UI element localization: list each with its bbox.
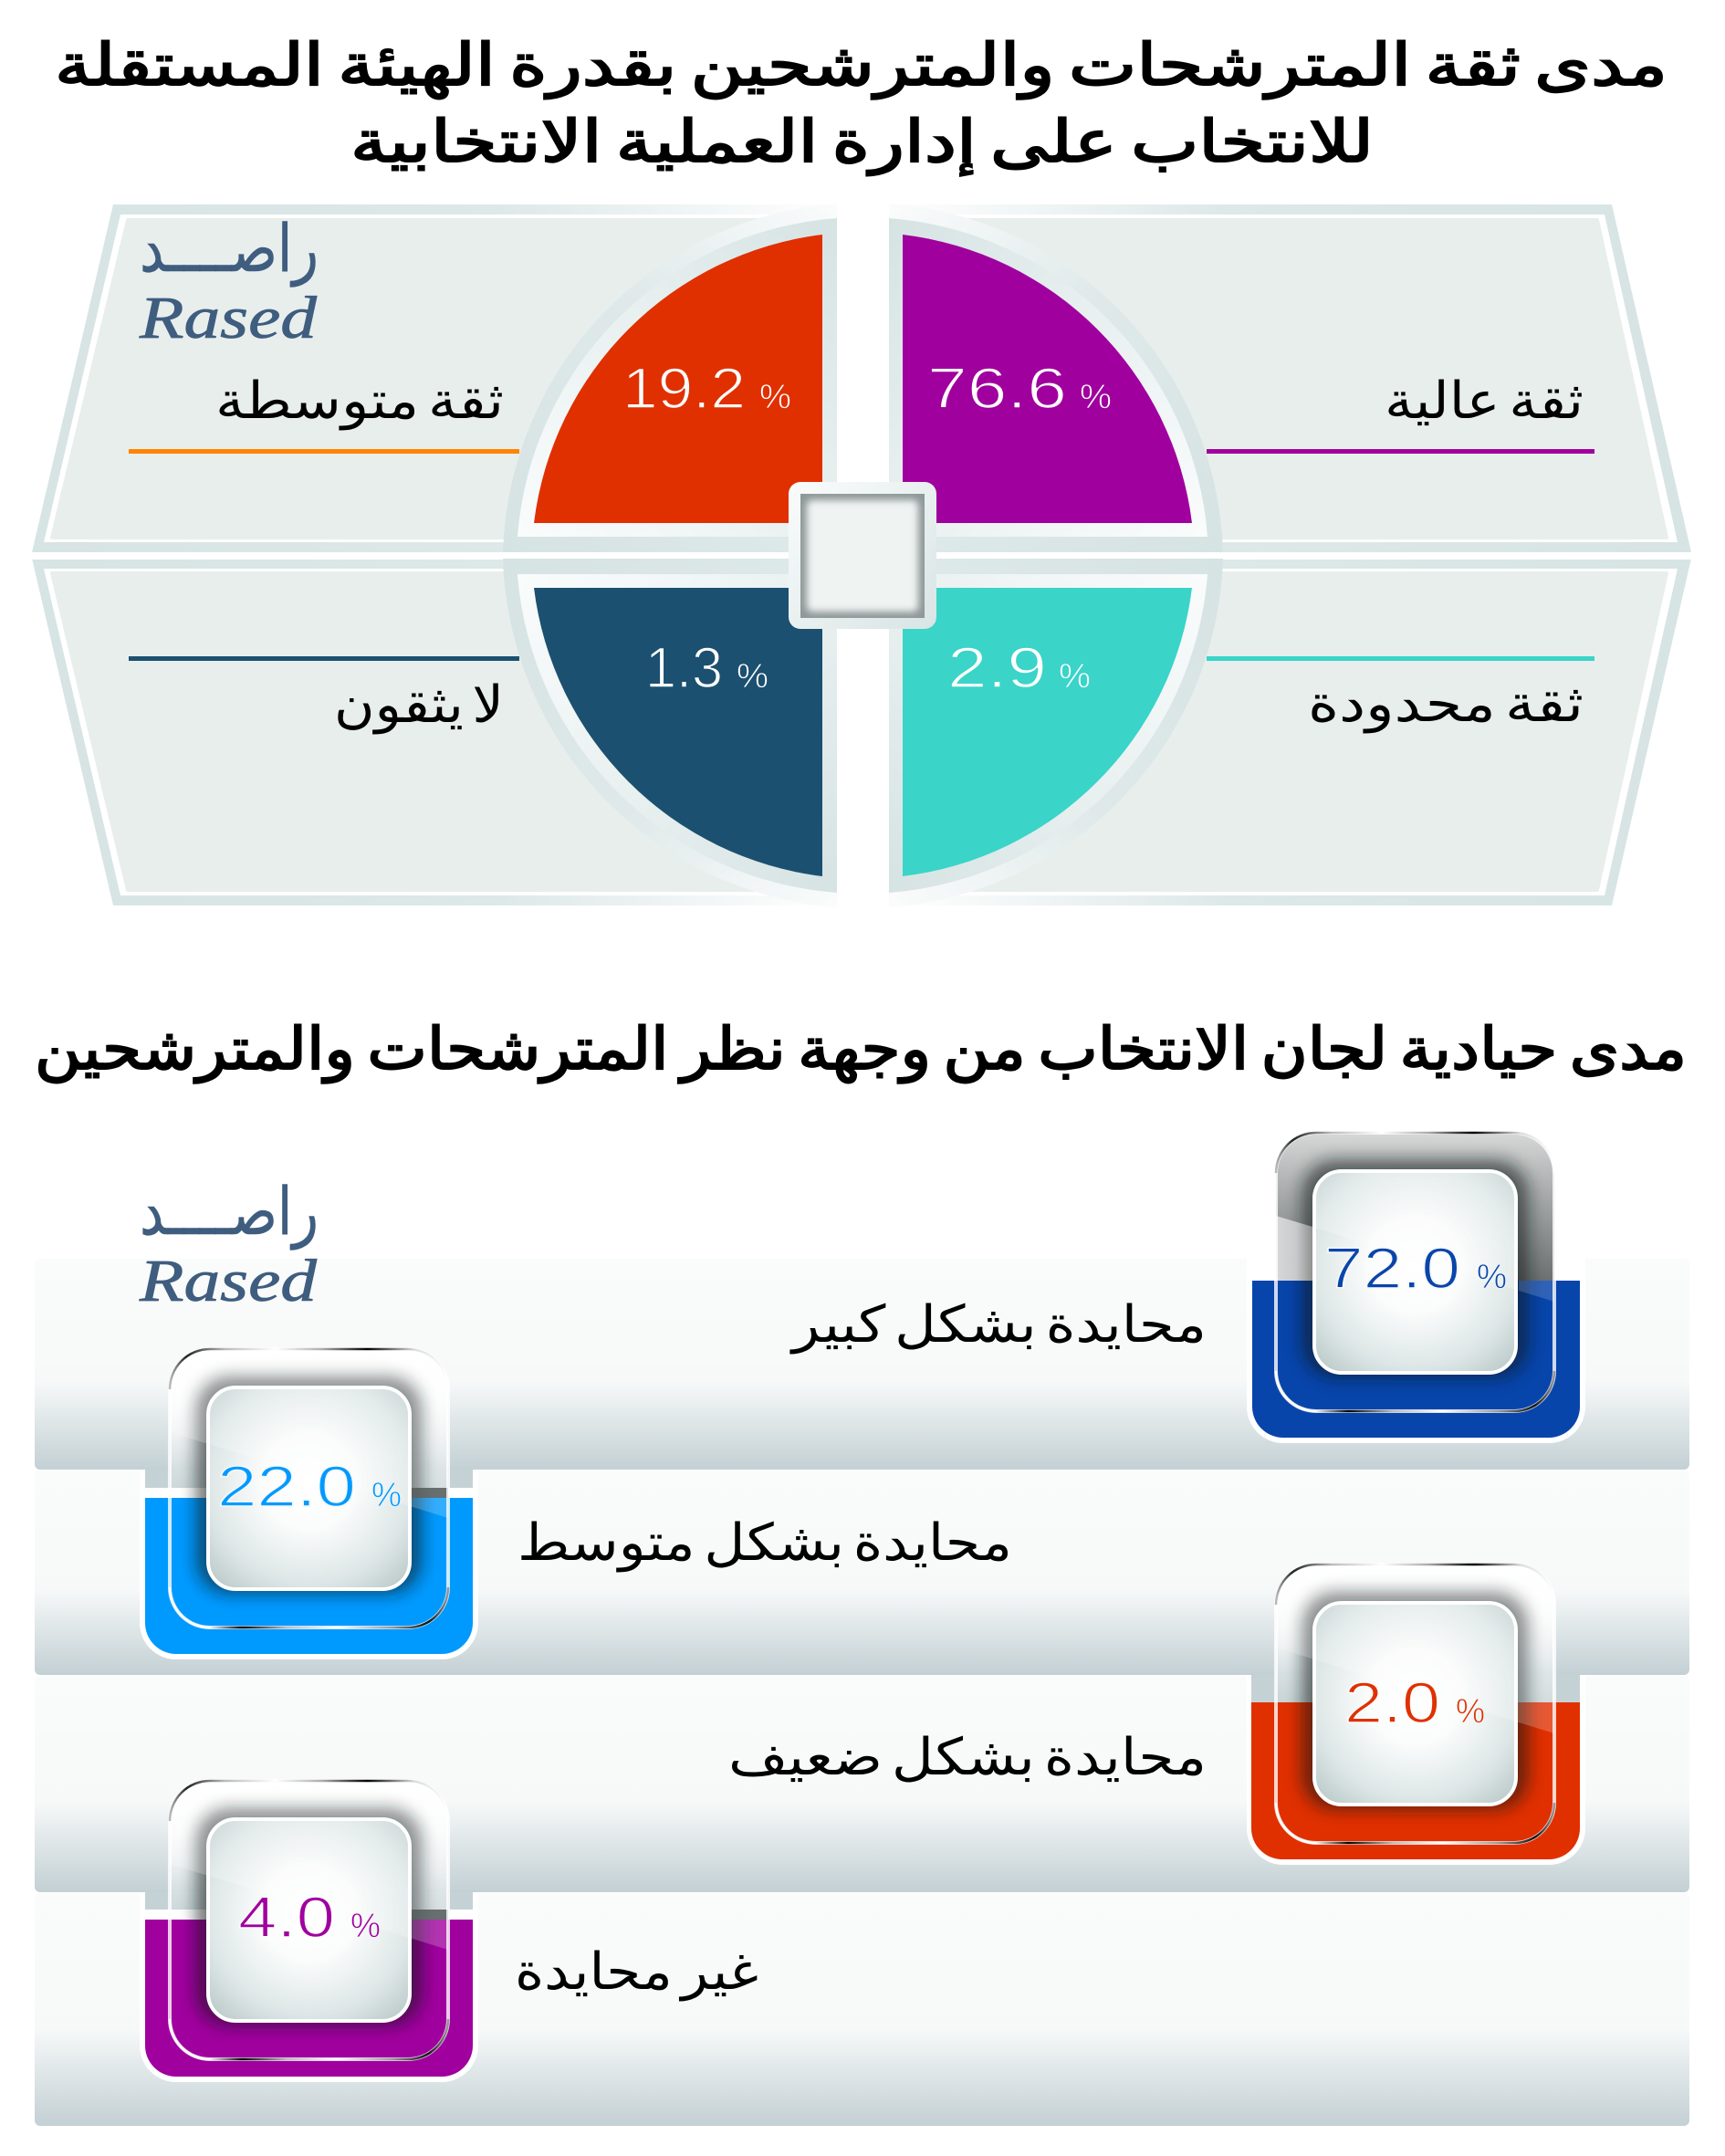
logo: Rased <box>139 210 319 351</box>
widget: medium neutrality 22.0 <box>140 1349 478 1659</box>
band 4 <box>35 1893 1689 2126</box>
label: medium neutrality: محايدة بشكل متوسط <box>518 1513 1012 1573</box>
percent sign: % <box>371 1476 402 1514</box>
panel: trust pie <box>27 196 1698 913</box>
leader line: high trust <box>1207 449 1594 454</box>
leader line: limited trust <box>1207 656 1594 661</box>
value 2.0: 2.0 <box>1344 1671 1440 1735</box>
leader line: medium trust <box>129 449 519 454</box>
subtitle: مدى حيادية لجان الانتخاب من وجهة نظر المترشحات والمترشحين <box>35 1016 1687 1083</box>
band 2 <box>35 1470 1689 1675</box>
band 3 <box>35 1676 1689 1892</box>
label: not neutral: غير محايدة <box>515 1942 758 2002</box>
logo: Rased: راصــــد <box>140 210 319 288</box>
percent sign: % <box>737 657 768 696</box>
panel: neutrality bands <box>35 1259 1689 2126</box>
label: high trust: ثقة عالية <box>1385 372 1584 431</box>
label: limited trust: ثقة محدودة <box>1308 675 1584 734</box>
value 2.9: 2.9 <box>947 636 1047 700</box>
label: weak neutrality: محايدة بشكل ضعيف <box>728 1728 1207 1787</box>
percent sign: % <box>1059 657 1091 696</box>
widget: not neutral 4.0 <box>140 1781 478 2082</box>
band 1 <box>35 1259 1689 1470</box>
value 19.2: 19.2 <box>622 357 746 421</box>
quadrant: high trust <box>889 204 1223 552</box>
quadrant: limited trust <box>889 559 1223 907</box>
logo: Rased second: Rased <box>139 1248 318 1314</box>
leader line: no trust <box>129 656 519 661</box>
logo: Rased second: راصــــد <box>140 1173 319 1251</box>
value 22.0: 22.0 <box>217 1455 356 1519</box>
widget: weak neutrality 2.0 <box>1247 1565 1585 1865</box>
center square <box>789 482 936 629</box>
title line 2: للانتخاب على إدارة العملية الانتخابية <box>350 109 1374 176</box>
percent sign: % <box>1080 378 1112 416</box>
quadrant: medium trust <box>503 204 837 552</box>
value 72.0: 72.0 <box>1324 1237 1460 1301</box>
value 1.3: 1.3 <box>645 636 723 700</box>
value 76.6: 76.6 <box>927 357 1067 421</box>
label: medium trust: ثقة متوسطة <box>215 372 504 431</box>
logo: Rased: Rased <box>139 285 318 351</box>
percent sign: % <box>1456 1692 1485 1731</box>
lower panel frame <box>32 559 1691 905</box>
widget: large neutrality 72.0 <box>1247 1133 1585 1443</box>
label: large neutrality: محايدة بشكل كبير <box>789 1295 1207 1355</box>
percent sign: % <box>350 1907 381 1945</box>
title line 1: مدى ثقة المترشحات والمترشحين بقدرة الهيئة المستقلة <box>55 32 1668 99</box>
label: no trust: لا يثقون <box>334 675 504 735</box>
percent sign: % <box>759 378 791 416</box>
upper panel frame <box>32 204 1691 552</box>
title <box>55 32 1668 176</box>
percent sign: % <box>1477 1258 1507 1296</box>
quadrant: no trust <box>503 559 837 907</box>
value 4.0: 4.0 <box>238 1886 335 1950</box>
logo: Rased second <box>139 1173 319 1314</box>
